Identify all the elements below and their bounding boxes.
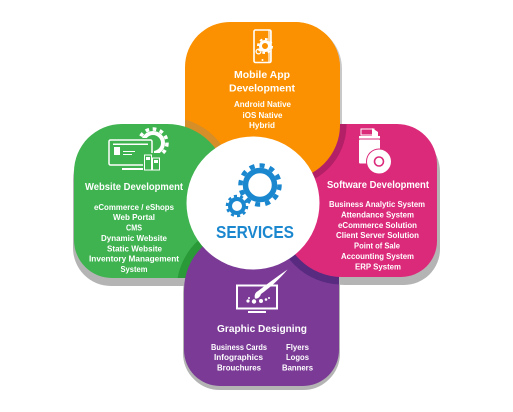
list: website services: System	[120, 265, 148, 274]
list: software services: Business Analytic System	[329, 200, 425, 209]
pink panel cast shadow on purple	[289, 254, 339, 284]
panel shadows	[73, 24, 440, 389]
list: website services	[89, 203, 179, 274]
icon: website monitor with gear	[107, 129, 167, 171]
list: mobile services: iOS Native	[242, 111, 283, 120]
list: graphic services	[211, 343, 313, 372]
heading: software development: Software Development	[327, 179, 429, 191]
center circle	[186, 136, 320, 270]
list: software services: ERP System	[355, 262, 401, 272]
icon: graphic monitor and brush	[237, 270, 288, 313]
list: website services: eCommerce / eShops	[94, 203, 174, 212]
purple panel cast shadow on green	[178, 240, 202, 278]
list: website services: Static Website	[107, 244, 162, 254]
list: mobile services: Android Native	[234, 100, 291, 109]
icon: software box and disc	[359, 128, 392, 174]
services label: SERVICES	[216, 222, 294, 242]
list: software services: Client Server Solution	[336, 231, 419, 240]
heading: mobile app development: Mobile App	[234, 69, 290, 81]
heading: mobile app development: Development	[229, 82, 295, 94]
icon: mobile phone with gear	[254, 30, 272, 62]
heading: graphic designing: Graphic Designing	[217, 323, 307, 335]
panel: website development background	[74, 124, 227, 278]
list: graphic services: Brouchures	[217, 364, 261, 372]
panel: graphic designing background	[184, 230, 339, 386]
orange panel cast shadow on pink	[312, 124, 346, 178]
list: software services: Accounting System	[341, 252, 414, 261]
list: software services: eCommerce Solution	[338, 221, 417, 230]
list: website services: Dynamic Website	[101, 234, 167, 243]
list: software services: Attendance System	[341, 210, 414, 220]
list: graphic services: Logos	[286, 353, 309, 362]
list: software services: Point of Sale	[354, 242, 400, 250]
icon: blue gears	[227, 166, 280, 216]
list: website services: Inventory Management	[89, 254, 179, 264]
list: graphic services: Business Cards	[211, 343, 267, 352]
list: mobile services	[234, 100, 291, 130]
list: graphic services: Infographics	[214, 353, 263, 362]
list: website services: Web Portal	[113, 213, 155, 222]
panel: software development background	[282, 124, 437, 277]
green panel cast shadow on orange	[185, 120, 221, 148]
list: website services: CMS	[126, 224, 143, 232]
list: software services	[329, 200, 425, 272]
list: graphic services: Flyers	[286, 343, 309, 352]
list: graphic services: Banners	[282, 364, 313, 372]
panel: mobile app background	[185, 22, 340, 180]
list: mobile services: Hybrid	[249, 121, 275, 130]
orange panel overlap over pink	[286, 22, 340, 173]
heading: website development: Website Development	[85, 181, 183, 193]
heading: mobile app development	[229, 69, 295, 94]
